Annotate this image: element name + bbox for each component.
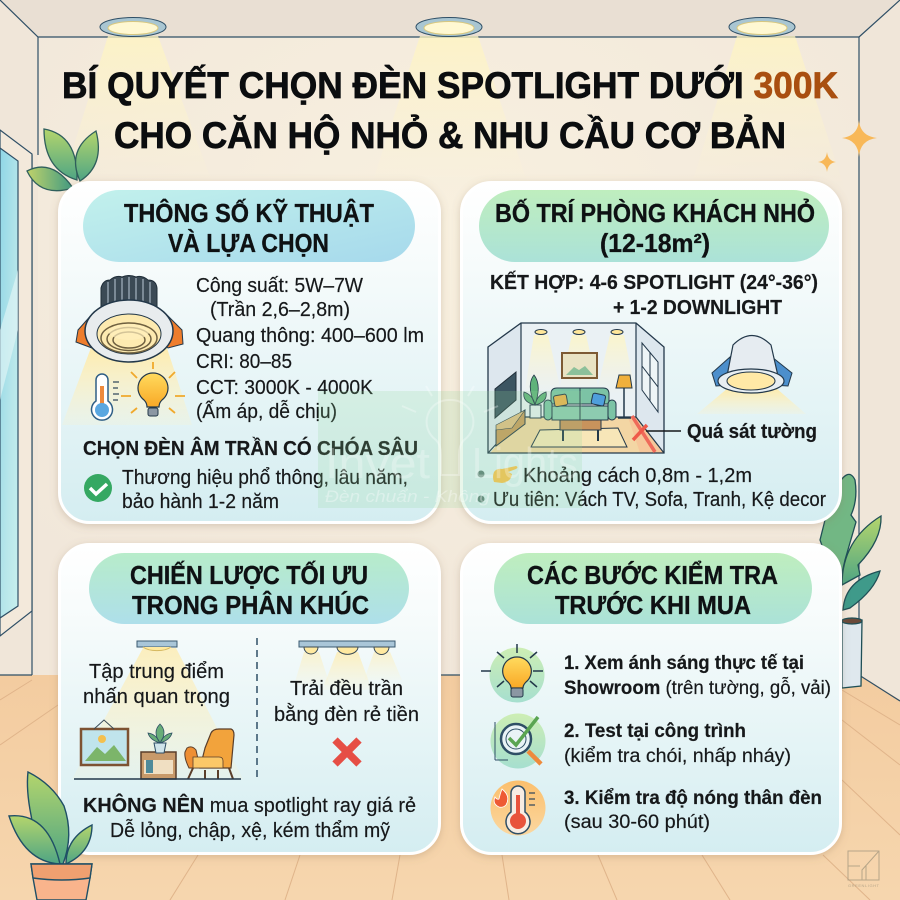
icon: corner logo: GREENLIGHT [848, 883, 880, 888]
heading pill: layout [479, 190, 829, 262]
spec list: CCT: 3000K - 4000K [196, 377, 374, 399]
warning text: Dễ lỏng, chập, xệ, kém thẩm mỹ [110, 819, 390, 842]
spec list [196, 275, 424, 423]
brand note: Thương hiệu phổ thông, lâu năm, [122, 467, 408, 489]
icon: right plant with pot [820, 474, 881, 688]
panel: optimisation strategy [60, 544, 440, 854]
icon: top-left leaves [27, 129, 98, 191]
icon: bottom-left potted plant [9, 772, 92, 900]
heading pill: checks: TRƯỚC KHI MUA [555, 590, 751, 620]
title [62, 64, 838, 156]
icon: recessed spotlight with beam [62, 276, 192, 425]
watermark: brand logo overlay [318, 386, 582, 508]
icon: downlight [697, 336, 806, 414]
warning text [83, 793, 416, 842]
focus text: nhấn quan trọng [83, 686, 230, 708]
icon: green check [84, 474, 112, 502]
heading pill: layout: BỐ TRÍ PHÒNG KHÁCH NHỎ [495, 197, 815, 228]
icon: thermometer [91, 374, 119, 420]
icon: light bulb [121, 362, 185, 416]
combination text [490, 271, 818, 319]
spec list: Công suất: 5W–7W [196, 275, 363, 297]
title: CHO CĂN HỘ NHỎ & NHU CẦU CƠ BẢN [114, 114, 786, 156]
icon: sparkles [818, 120, 877, 172]
ceiling spotlights with beams [60, 18, 845, 190]
window on left wall [0, 130, 32, 636]
heading pill: checks: CÁC BƯỚC KIỂM TRA [527, 560, 778, 590]
title: BÍ QUYẾT CHỌN ĐÈN SPOTLIGHT DƯỚI 300K [62, 64, 838, 106]
callout: too close to wall: Quá sát tường [687, 421, 817, 443]
watermark: brand logo overlay: Lights [472, 439, 578, 488]
step 2 text: (kiểm tra chói, nhấp nháy) [564, 746, 791, 767]
heading pill: strategy: CHIẾN LƯỢC TỐI ƯU [130, 560, 368, 590]
icon: bulb step [481, 644, 544, 702]
step 2 text: 2. Test tại công trình [564, 721, 746, 742]
brand note: bảo hành 1-2 năm [122, 491, 279, 513]
brand note [122, 467, 408, 513]
watermark: brand logo overlay: Đèn chuẩn - Không [325, 487, 491, 506]
icon: thermometer step [490, 780, 546, 836]
step 3 text: (sau 30-60 phút) [564, 812, 710, 833]
recommendation heading: CHỌN ĐÈN ÂM TRẦN CÓ CHÓA SÂU [83, 436, 418, 460]
icon: focused light and decor [72, 641, 243, 779]
icon: red cross [335, 740, 359, 764]
warning text: KHÔNG NÊN mua spotlight ray giá rẻ [83, 793, 416, 817]
step 1 text: Showroom (trên tường, gỗ, vải) [564, 677, 831, 699]
panel: small living room layout [462, 182, 840, 522]
step 3 text: 3. Kiểm tra độ nóng thân đèn [564, 788, 822, 809]
combination text: + 1-2 DOWNLIGHT [613, 297, 782, 319]
heading pill: specs: THÔNG SỐ KỸ THUẬT [124, 198, 374, 228]
spec list: CRI: 80–85 [196, 351, 292, 373]
spec list: Quang thông: 400–600 lm [196, 325, 424, 347]
spec list: (Trần 2,6–2,8m) [210, 299, 350, 321]
heading pill: specs: VÀ LỰA CHỌN [168, 228, 329, 258]
step 1 text: 1. Xem ánh sáng thực tế tại [564, 653, 804, 674]
step 2 text [564, 721, 791, 767]
step 3 text [564, 788, 822, 833]
panel: checks before buying [462, 544, 840, 854]
bullet: spacing: Khoảng cách 0,8m - 1,2m [523, 465, 752, 487]
heading pill: layout: (12-18m²) [600, 228, 710, 258]
watermark: brand logo overlay: Invet [325, 439, 430, 488]
heading pill: strategy [89, 553, 409, 624]
heading pill: specs [83, 190, 415, 262]
focus text: Tập trung điểm [89, 661, 224, 683]
icon: magnifier check step [490, 714, 546, 768]
even spread text: bằng đèn rẻ tiền [274, 703, 419, 726]
even spread text: Trải đều trần [290, 678, 403, 700]
icon: track light [294, 641, 402, 690]
heading pill: checks [494, 553, 812, 624]
icon: corner logo [848, 851, 880, 888]
bullet: priority: Ưu tiên: Vách TV, Sofa, Tranh, Kệ decor [493, 489, 826, 511]
focus text [83, 661, 230, 708]
combination text: KẾT HỢP: 4-6 SPOTLIGHT (24°-36°) [490, 271, 818, 294]
step 1 text [564, 653, 831, 699]
spec list: (Ấm áp, dễ chịu) [196, 400, 337, 423]
heading pill: strategy: TRONG PHÂN KHÚC [132, 590, 369, 620]
panel: technical specs [60, 182, 440, 522]
even spread text [274, 678, 419, 726]
room illustration [488, 323, 664, 453]
